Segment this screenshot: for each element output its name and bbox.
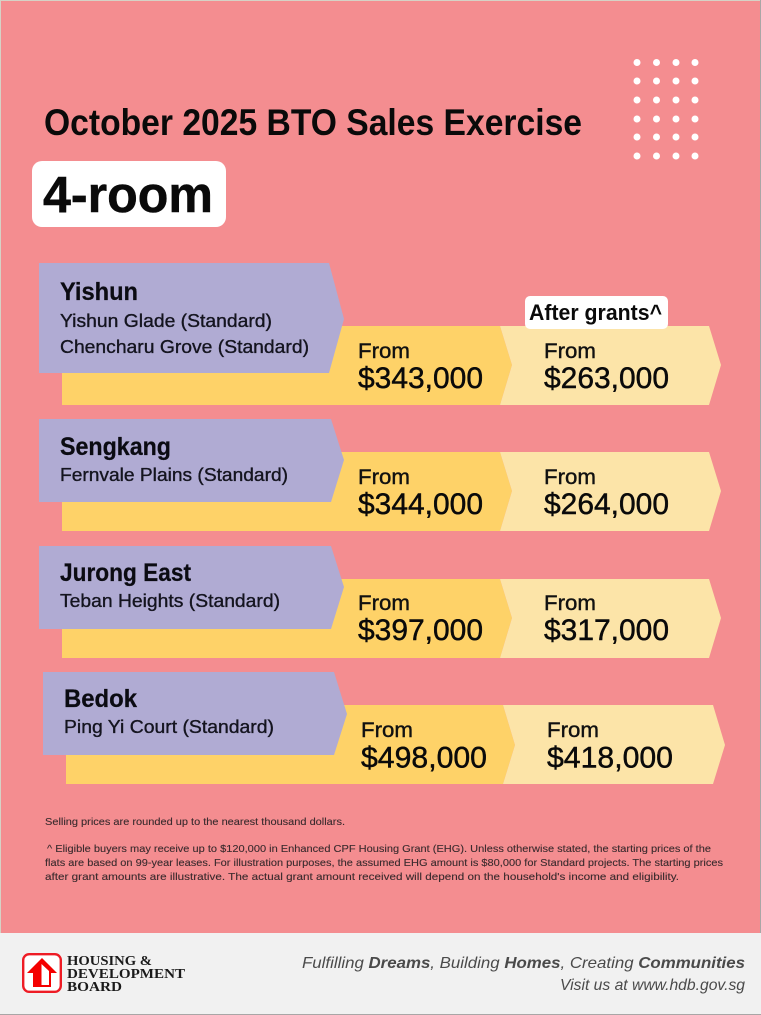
price arrow: after grants [500,326,721,405]
project name: Yishun Glade (Standard) [60,311,272,331]
price arrow: after grants [503,705,725,784]
footnotes [45,816,723,883]
HDB wordmark: HOUSING & [67,953,152,968]
decorative dot grid [634,59,698,160]
price before grants: $498,000 [361,742,487,774]
panel: Yishun [39,263,721,405]
town name: Jurong East [60,559,192,587]
price arrow: before grants [62,452,512,531]
town label arrow [43,672,347,755]
price arrow: after grants [500,579,721,658]
panel: Bedok [43,672,725,784]
town name: Yishun [60,278,138,306]
price after grants: $317,000 [544,614,669,647]
price after grants: $418,000 [547,742,673,774]
flat type badge: 4-room: 4-room [43,166,213,223]
HDB wordmark [67,953,185,994]
price after grants: $263,000 [544,362,669,395]
footnotes: after grant amounts are illustrative. The actual grant amount received will depend on the household's income and eligibility. [45,871,679,883]
label: from: From [358,339,410,363]
price arrow: before grants [66,705,515,784]
footer panel [0,933,761,1015]
price before grants: $344,000 [358,488,483,521]
HDB wordmark: BOARD [67,979,122,994]
footnotes: ^ Eligible buyers may receive up to $120,000 in Enhanced CPF Housing Grant (EHG). Unless otherwise stated, the starting prices of the [47,843,711,855]
project name: Fernvale Plains (Standard) [60,465,288,485]
town name: Bedok [64,685,137,713]
panel: Sengkang [39,419,721,531]
label: from: From [544,591,596,615]
town label arrow [39,419,344,502]
after grants badge: After grants^ [529,300,662,325]
price before grants: $343,000 [358,362,483,395]
price arrow: before grants [62,326,512,405]
panel: Jurong East [39,546,721,658]
icon: HDB logo [23,954,61,992]
label: from: From [361,718,413,742]
price before grants: $397,000 [358,614,483,647]
town label arrow [39,546,344,629]
title: October 2025 BTO Sales Exercise [44,102,582,143]
project name: Teban Heights (Standard) [60,591,280,611]
footnotes: Selling prices are rounded up to the nearest thousand dollars. [45,816,345,828]
label: from: From [544,465,596,489]
project name: Ping Yi Court (Standard) [64,717,274,737]
project name: Chencharu Grove (Standard) [60,337,309,357]
label: from: From [358,465,410,489]
label: from: From [358,591,410,615]
website: Visit us at www.hdb.gov.sg [560,977,745,994]
price after grants: $264,000 [544,488,669,521]
price arrow: after grants [500,452,721,531]
town name: Sengkang [60,433,171,461]
label: from: From [544,339,596,363]
price arrow: before grants [62,579,512,658]
label: from: From [547,718,599,742]
tagline: Fulfilling Dreams, Building Homes, Creating Communities [302,955,745,972]
footnotes: flats are based on 99-year leases. For illustration purposes, the assumed EHG amount is $80,000 for Standard projects. The starting prices [45,857,723,869]
HDB wordmark: DEVELOPMENT [67,966,185,981]
town label arrow [39,263,344,373]
